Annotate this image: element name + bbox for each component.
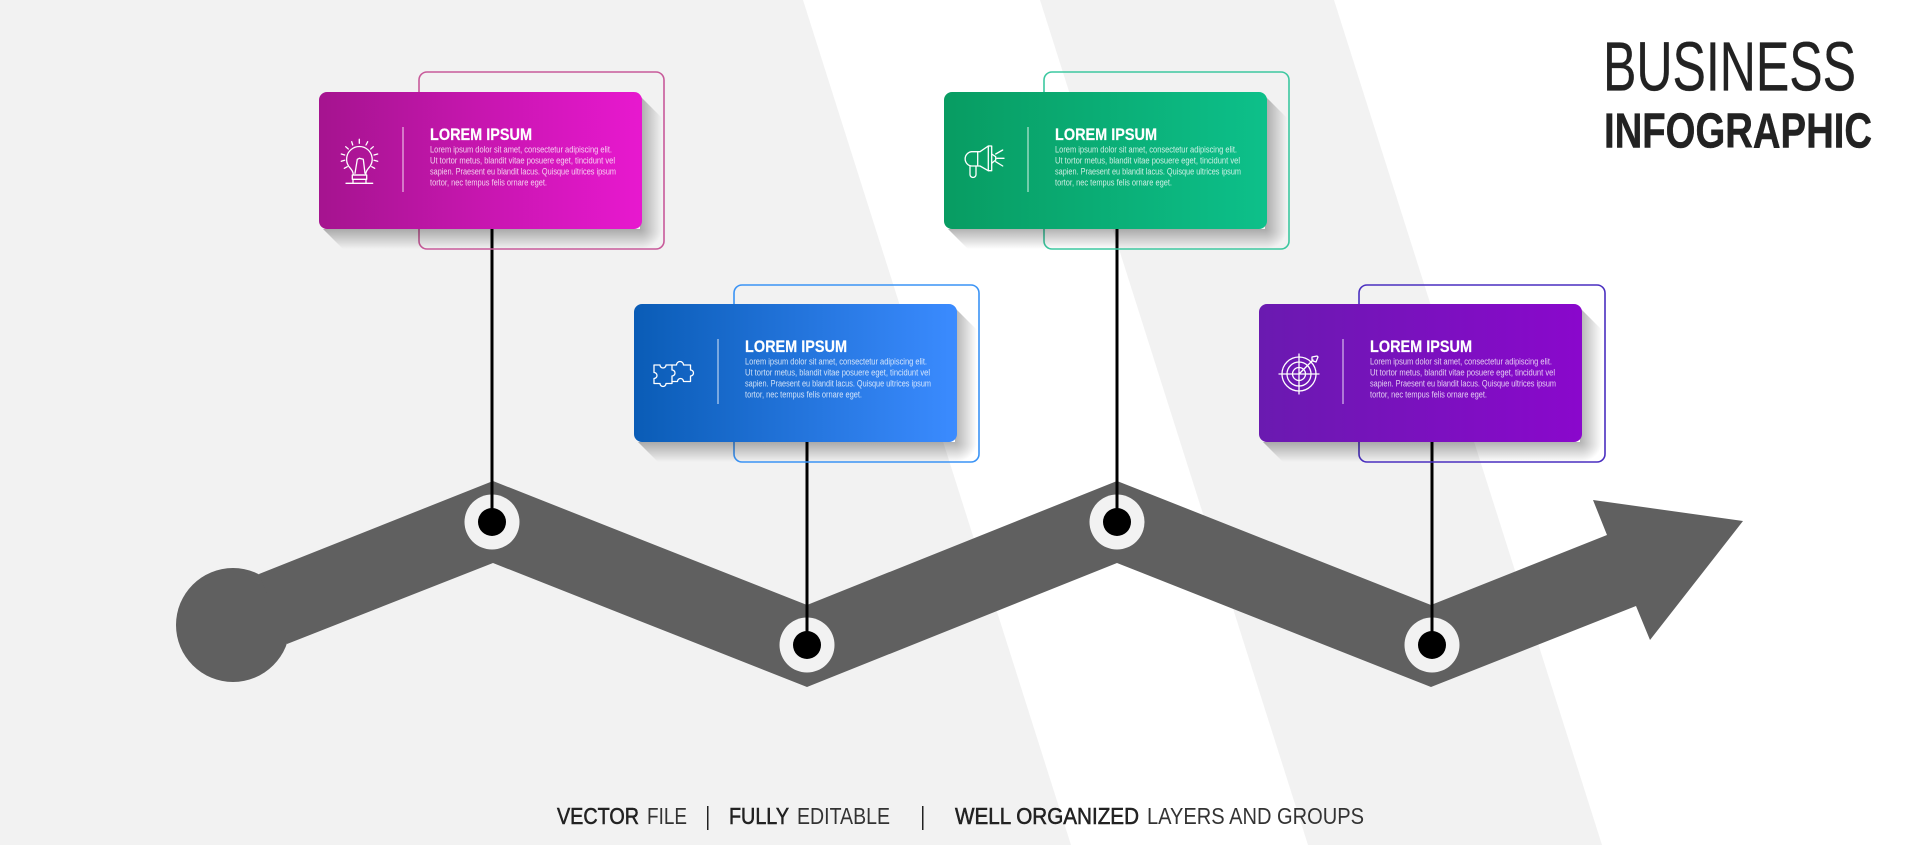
node 2 xyxy=(780,442,834,672)
footer text: VECTOR xyxy=(557,803,639,829)
panel: card 1 magenta: tortor, nec tempus felis ornare eget. xyxy=(430,178,547,188)
title xyxy=(1603,28,1872,158)
footer text: WELL ORGANIZED xyxy=(955,803,1139,829)
footer text: FILE xyxy=(647,803,687,829)
panel: card 4 purple xyxy=(1259,285,1605,462)
panel: card 3 green: Lorem ipsum dolor sit amet, consectetur adipiscing elit. xyxy=(1055,144,1237,154)
panel: card 2 blue xyxy=(634,285,979,462)
panel: card 4 purple: sapien. Praesent eu blandit lacus. Quisque ultrices ipsum xyxy=(1370,378,1556,388)
footer text: LAYERS AND GROUPS xyxy=(1147,803,1364,829)
node 1 xyxy=(464,229,520,550)
panel: card 2 blue: Ut tortor metus, blandit vitae posuere eget, tincidunt vel xyxy=(745,368,930,378)
icon: light bulb xyxy=(341,139,378,183)
panel: card 4 purple: Lorem ipsum dolor sit amet, consectetur adipiscing elit. xyxy=(1370,356,1552,366)
panel: card 2 blue: tortor, nec tempus felis ornare eget. xyxy=(745,390,862,400)
panel: card 4 purple: tortor, nec tempus felis ornare eget. xyxy=(1370,390,1487,400)
panel: card 1 magenta: Lorem ipsum dolor sit amet, consectetur adipiscing elit. xyxy=(430,144,612,154)
node 4 xyxy=(1404,442,1460,672)
zigzag timeline arrow xyxy=(176,481,1743,687)
footer text xyxy=(557,803,1364,830)
panel: card 2 blue: LOREM IPSUM xyxy=(745,337,847,356)
icon: puzzle pieces xyxy=(654,362,694,386)
panel: card 3 green: tortor, nec tempus felis ornare eget. xyxy=(1055,178,1172,188)
panel: card 4 purple: Ut tortor metus, blandit vitae posuere eget, tincidunt vel xyxy=(1370,368,1555,378)
panel: card 3 green: LOREM IPSUM xyxy=(1055,125,1157,144)
panel: card 3 green: sapien. Praesent eu blandit lacus. Quisque ultrices ipsum xyxy=(1055,166,1241,176)
panel: card 2 blue: Lorem ipsum dolor sit amet, consectetur adipiscing elit. xyxy=(745,356,927,366)
panel: card 3 green xyxy=(944,72,1289,249)
panel: card 1 magenta: sapien. Praesent eu blandit lacus. Quisque ultrices ipsum xyxy=(430,166,616,176)
icon: megaphone xyxy=(965,146,1004,178)
node 3 xyxy=(1090,229,1144,550)
footer text: EDITABLE xyxy=(797,803,890,829)
panel: card 2 blue: sapien. Praesent eu blandit lacus. Quisque ultrices ipsum xyxy=(745,378,931,388)
panel: card 4 purple: LOREM IPSUM xyxy=(1370,337,1472,356)
icon: target with dart xyxy=(1279,354,1319,394)
footer text: FULLY xyxy=(729,803,789,829)
panel: card 1 magenta: Ut tortor metus, blandit vitae posuere eget, tincidunt vel xyxy=(430,156,615,166)
panel: card 1 magenta xyxy=(319,72,664,249)
panel: card 1 magenta: LOREM IPSUM xyxy=(430,125,532,144)
panel: card 3 green: Ut tortor metus, blandit vitae posuere eget, tincidunt vel xyxy=(1055,156,1240,166)
